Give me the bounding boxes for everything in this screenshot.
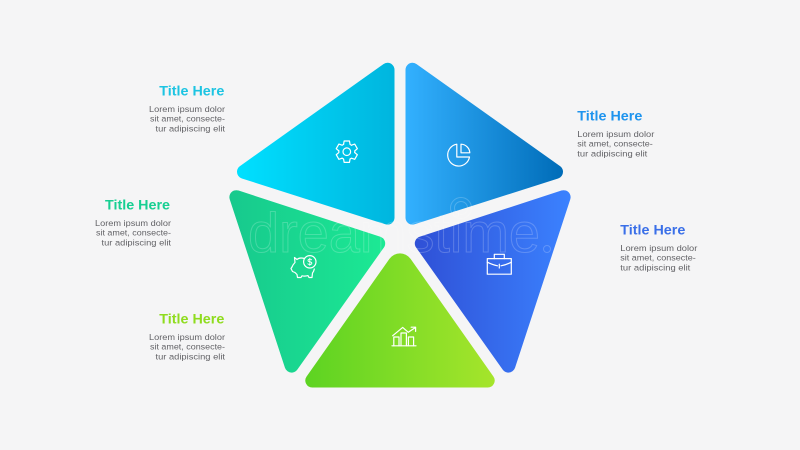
body text <box>577 129 654 158</box>
body text: sit amet, consecte- <box>150 114 225 124</box>
heading: Title Here <box>159 312 225 326</box>
text block: middle right <box>620 222 697 272</box>
text block: top right <box>577 108 654 158</box>
cyan segment shape <box>244 70 388 218</box>
body text: sit amet, consecte- <box>150 342 225 352</box>
panel: royal blue segment with briefcase icon <box>422 197 564 366</box>
body text: tur adipiscing elit <box>156 123 226 133</box>
heading: Title Here <box>105 198 171 212</box>
body text: tur adipiscing elit <box>156 351 226 361</box>
heading: Title Here <box>159 84 225 98</box>
icon: pie chart <box>448 144 470 166</box>
body text: Lorem ipsum dolor <box>149 332 225 342</box>
icon: gear <box>335 141 358 162</box>
lime segment shape <box>305 253 495 388</box>
panel: sky blue segment with pie chart icon <box>412 70 556 218</box>
watermark: dreamstime <box>248 201 540 264</box>
body text <box>95 218 172 247</box>
body text <box>149 104 226 133</box>
green segment shape <box>236 197 378 366</box>
text block: middle left <box>95 198 172 247</box>
icon: piggy bank with coin <box>291 256 316 278</box>
body text: sit amet, consecte- <box>96 228 171 238</box>
body text: sit amet, consecte- <box>620 253 696 263</box>
body text: Lorem ipsum dolor <box>620 243 697 253</box>
panel: cyan segment with gear icon <box>244 70 388 218</box>
royal blue segment shape <box>422 197 564 366</box>
text block: top left <box>149 84 226 133</box>
heading: Title Here <box>577 108 643 124</box>
heading: Title Here <box>620 222 686 238</box>
body text: sit amet, consecte- <box>577 139 653 149</box>
sky blue segment shape <box>412 70 556 218</box>
body text <box>149 332 226 361</box>
text block: bottom left <box>149 312 226 361</box>
panel: lime segment with growth chart icon <box>305 253 495 388</box>
body text: tur adipiscing elit <box>102 237 172 247</box>
body text: Lorem ipsum dolor <box>577 129 654 139</box>
body text: Lorem ipsum dolor <box>95 218 171 228</box>
icon: briefcase <box>487 254 511 274</box>
body text: tur adipiscing elit <box>577 148 648 158</box>
body text: tur adipiscing elit <box>620 262 691 272</box>
body text: Lorem ipsum dolor <box>149 104 225 114</box>
panel: green segment with piggy bank icon <box>236 197 378 366</box>
body text <box>620 243 697 272</box>
icon: growth chart <box>392 327 416 346</box>
